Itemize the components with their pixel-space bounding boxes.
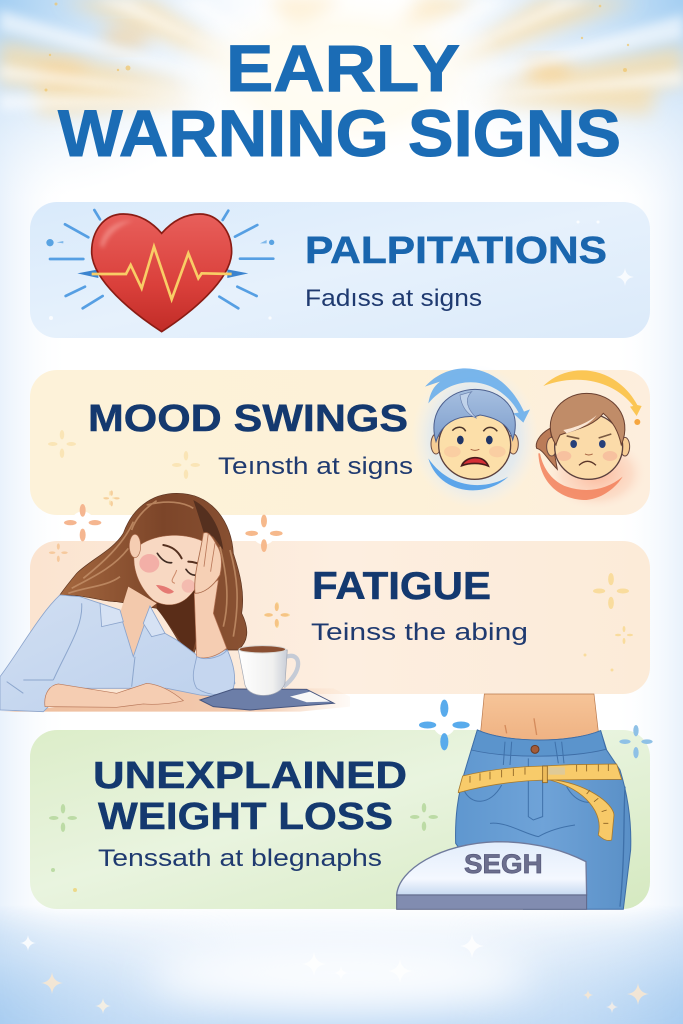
icon: two faces with arrows xyxy=(412,365,647,510)
illustration: tired woman at table xyxy=(0,490,350,712)
panel: mood swings xyxy=(30,365,650,515)
button xyxy=(531,745,539,753)
dark hair at parting xyxy=(193,500,223,550)
hair back xyxy=(59,493,247,660)
description: Teinss the abing xyxy=(311,619,528,646)
title: EARLY xyxy=(226,31,460,105)
hair strands xyxy=(68,501,237,637)
description: Tenssath at blegnaphs xyxy=(98,845,382,872)
icon: sparkles xyxy=(264,573,633,672)
raised arm xyxy=(194,580,227,658)
heading: WEIGHT LOSS xyxy=(98,796,393,838)
face: distressed xyxy=(431,389,518,479)
bottom sparkles xyxy=(20,934,649,1014)
icon: sparkles xyxy=(48,430,200,505)
fingers xyxy=(204,533,215,572)
panel: unexplained weight loss xyxy=(30,694,653,909)
sunburst rays xyxy=(0,0,683,165)
panel: palpitations xyxy=(30,202,650,338)
facial features xyxy=(139,545,205,594)
orange glow xyxy=(547,437,647,510)
napkin xyxy=(290,692,330,702)
heading: UNEXPLAINED xyxy=(93,755,407,797)
face xyxy=(134,535,207,605)
sparkle blue xyxy=(419,700,470,750)
title xyxy=(58,31,621,170)
waistband xyxy=(471,730,606,756)
title: WARNING SIGNS xyxy=(58,96,621,170)
icon: heart with pulse xyxy=(46,210,274,332)
shirt collar xyxy=(100,603,165,637)
jeans details xyxy=(464,742,600,837)
forearm on table xyxy=(45,683,183,707)
shirt body xyxy=(0,595,235,712)
sparkle green xyxy=(619,725,653,758)
heading: MOOD SWINGS xyxy=(88,398,408,440)
blue glow xyxy=(412,365,538,508)
table xyxy=(0,688,350,712)
ear xyxy=(129,534,141,558)
heading: PALPITATIONS xyxy=(305,230,607,272)
measuring tape xyxy=(458,764,622,840)
arrow: orange lower xyxy=(538,453,623,500)
heading: FATIGUE xyxy=(312,565,491,608)
icon: sparkles xyxy=(49,220,634,320)
arrow: blue lower xyxy=(428,458,508,490)
coffee cup xyxy=(238,646,298,695)
card background xyxy=(30,202,650,338)
tablet xyxy=(200,689,334,710)
panel: fatigue xyxy=(30,541,650,694)
hand on head xyxy=(195,533,221,593)
scale: SEGH xyxy=(464,849,543,879)
card background xyxy=(30,370,650,515)
neck xyxy=(120,587,157,657)
heading xyxy=(93,755,407,838)
description: Teınsth at signs xyxy=(218,453,413,480)
arrow: yellow upper xyxy=(543,370,642,416)
belly xyxy=(479,694,600,747)
arrow: blue upper xyxy=(425,368,530,423)
illustration: jeans, tape and scale xyxy=(397,694,653,909)
description: Fadıss at signs xyxy=(305,285,482,312)
cuff xyxy=(193,650,235,695)
sparkles xyxy=(49,490,289,627)
card background xyxy=(30,730,650,909)
jeans xyxy=(456,730,631,909)
icon: sparkles xyxy=(49,803,438,892)
card background xyxy=(30,541,650,694)
shirt fold lines xyxy=(7,603,135,693)
scale xyxy=(397,842,587,909)
face: frowning xyxy=(536,393,630,479)
hair shadow behind neck xyxy=(157,590,197,657)
